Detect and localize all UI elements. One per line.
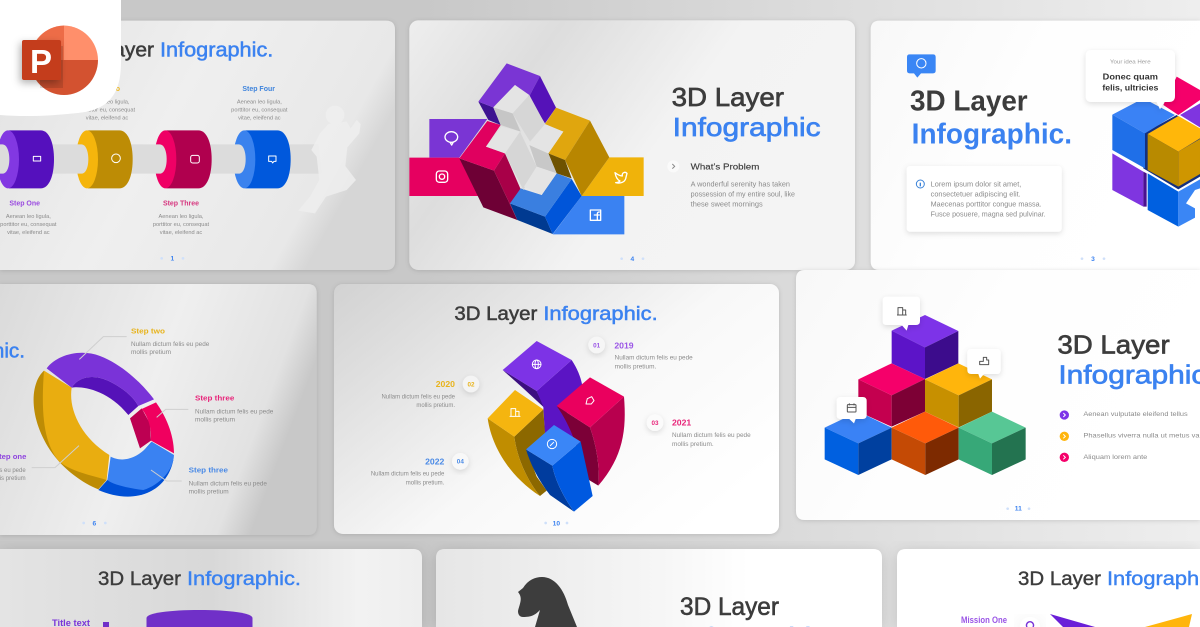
label: step two: Step two — [131, 326, 165, 335]
marker — [103, 622, 109, 627]
label: step four: Step Four — [242, 86, 275, 93]
label: step three: porttitor eu, consequat — [153, 222, 210, 228]
icon: globe — [532, 360, 541, 369]
white card overlapping cube — [1186, 188, 1200, 240]
label: 2022 — [371, 453, 469, 486]
title: bottom left: Infographic. — [187, 569, 301, 590]
title: slide 3: 3D Layer — [910, 86, 1028, 118]
cylinder: step four — [200, 130, 291, 188]
callout: calendar icon — [837, 397, 867, 423]
bar: connector to runner — [260, 144, 322, 174]
label: step one — [0, 200, 57, 236]
isometric block stack — [459, 63, 609, 234]
label: step three blue: mollis pretium — [189, 490, 229, 496]
title: slide 1: Infographic. — [160, 40, 273, 62]
label: 2021: 03 — [651, 420, 659, 427]
panel: slide 3 — [871, 21, 1200, 270]
page number: 3 — [1091, 256, 1095, 263]
label: step one: vitae, eleifend ac — [7, 230, 50, 236]
panel: slide 10 bars — [334, 284, 779, 534]
label: 2019: Nullam dictum felis eu pede — [615, 356, 693, 362]
title: slide 11: 3D Layer — [1057, 329, 1170, 359]
label: step two: vitae, eleifend ac — [86, 115, 128, 121]
label: mission one: Mission One — [961, 615, 1007, 625]
label: step three blue — [189, 466, 268, 496]
label: step two — [79, 86, 136, 121]
cylinder — [146, 610, 252, 627]
panel: slide 1 step cylinders — [0, 21, 395, 270]
text: what's problem — [691, 161, 795, 209]
callout: your idea here: felis, ultricies — [1102, 82, 1159, 92]
page number: 1 — [170, 256, 174, 263]
text: what's problem: What’s Problem — [691, 161, 759, 171]
label: step three blue: Step three — [189, 466, 228, 475]
panel: slide bottom middle — [436, 549, 882, 627]
panel: slide 4 layered blocks — [409, 20, 855, 270]
label: step three pink — [195, 394, 274, 424]
cylinder: step one — [0, 130, 54, 188]
page number: 11 — [1015, 506, 1022, 513]
label: step one: Step One — [9, 200, 40, 207]
label: step four: Aenean leo ligula, — [237, 99, 282, 105]
title: bottom right: 3D Layer — [1018, 569, 1102, 590]
label: 2019: 2019 — [614, 340, 634, 350]
title: bottom left — [98, 569, 301, 590]
label: step three pink: Step three — [195, 394, 234, 403]
label: step three: Aenean leo ligula, — [159, 214, 204, 220]
page number: 4 — [630, 256, 634, 263]
page number — [160, 256, 184, 263]
bullet list: Aliquam lorem ante — [1083, 454, 1148, 461]
runner silhouette — [298, 106, 361, 213]
label: 2019: 01 — [593, 342, 601, 349]
isometric cubes — [825, 315, 1026, 475]
page number — [544, 520, 568, 527]
page number — [1006, 506, 1030, 513]
title: slide 3 — [910, 86, 1072, 150]
arrow: yellow — [1145, 614, 1192, 627]
label: 2022: mollis pretium. — [406, 480, 445, 486]
text: what's problem: possession of my entire soul, like — [691, 192, 795, 199]
icon: chat bubble — [907, 54, 936, 78]
title: slide 11 — [1057, 329, 1200, 389]
label: 2021: 2021 — [672, 418, 691, 428]
text: what's problem: A wonderful serenity has taken — [691, 182, 790, 189]
flat ribbons — [409, 119, 644, 234]
title: bottom middle: 3D Layer — [680, 593, 779, 621]
icon: twitter — [615, 172, 627, 183]
label: 2021: mollis pretium. — [672, 442, 714, 448]
bullet list: Phasellus viverra nulla ut metus varius — [1083, 433, 1200, 440]
title: bottom left: 3D Layer — [98, 569, 182, 590]
arrow: purple — [1050, 614, 1095, 627]
label: step two: mollis pretium — [131, 350, 171, 356]
label: step one — [0, 452, 26, 482]
label: 2019 — [588, 337, 693, 371]
icon: chess knight — [518, 577, 577, 627]
label: step three — [153, 200, 210, 236]
callout: building icon — [883, 297, 920, 331]
title: slide 3: Infographic. — [912, 118, 1072, 150]
cube stack: slide 3 — [1086, 50, 1200, 240]
panel: slide 6 donut — [0, 284, 317, 535]
icon: building — [510, 409, 520, 416]
bullet chevron — [667, 160, 679, 172]
label: 2020: mollis pretium. — [416, 403, 455, 409]
label: 2020 — [381, 376, 479, 409]
icon: line — [445, 132, 458, 145]
page number: 6 — [92, 520, 96, 527]
leader lines — [32, 337, 188, 481]
cylinder: step three — [123, 130, 212, 188]
icon: PowerPoint logo: P — [30, 43, 52, 80]
page number — [1081, 256, 1105, 263]
title: slide 11: Infographic — [1058, 359, 1200, 389]
label: step four — [231, 86, 288, 121]
card: lorem ipsum: Lorem ipsum dolor sit amet, — [931, 182, 1021, 189]
title: slide 1 — [69, 40, 273, 62]
label: step three: Step Three — [163, 200, 199, 207]
label: step three: vitae, eleifend ac — [160, 230, 202, 236]
label: 2021: Nullam dictum felis eu pede — [672, 433, 751, 439]
label: 2022: 04 — [457, 459, 464, 466]
title: slide 10 — [454, 304, 658, 325]
label: step two — [131, 326, 210, 356]
label: step two: porttitor eu, consequat — [79, 107, 136, 113]
page number — [82, 520, 107, 527]
label: step two: Aenean leo ligula, — [85, 99, 130, 105]
title: slide 4: 3D Layer — [672, 82, 784, 112]
page number — [620, 256, 644, 263]
title: slide 10: Infographic. — [543, 304, 658, 325]
title: slide 4: Infographic — [673, 112, 821, 142]
card: lorem ipsum: Maecenas porttitor congue massa. — [931, 202, 1042, 209]
label: 2020: 2020 — [436, 379, 455, 389]
title: slide 10: 3D Layer — [454, 304, 538, 325]
3D bar chart — [488, 341, 625, 512]
label: 2020: Nullam dictum felis eu pede — [381, 394, 456, 400]
icon: instagram — [436, 171, 448, 182]
label: step two: Step Two — [89, 86, 120, 93]
label: 2020: 02 — [467, 381, 475, 388]
label: 2022: Nullam dictum felis eu pede — [371, 472, 445, 478]
label: 2019: mollis pretium. — [615, 365, 657, 371]
panel: slide bottom left — [0, 549, 422, 627]
label: step two: Nullam dictum felis eu pede — [131, 342, 210, 348]
label: step four: vitae, eleifend ac — [238, 115, 281, 121]
icon: compass — [547, 439, 557, 449]
label: step four: porttitor eu, consequat — [231, 107, 288, 113]
text: what's problem: these sweet mornings — [691, 202, 763, 209]
card: lorem ipsum: consectetuer adipiscing elit. — [931, 192, 1021, 199]
donut chart — [34, 353, 174, 497]
title: bottom middle — [680, 593, 826, 627]
icon: mission badge — [1020, 617, 1040, 627]
card: lorem ipsum — [907, 166, 1062, 232]
page number: 10 — [553, 520, 560, 527]
label: 2021 — [647, 414, 751, 448]
title: bottom right — [1018, 569, 1200, 590]
label: step one: porttitor eu, consequat — [0, 222, 57, 228]
label: step three pink: mollis pretium — [195, 418, 235, 424]
callout: chart icon — [967, 349, 1001, 379]
icon: facebook — [590, 210, 601, 220]
title: slide 1: 3D Layer — [69, 40, 154, 62]
bullet list: Aenean vulputate eleifend tellus — [1083, 411, 1188, 418]
callout: your idea here: Donec quam — [1103, 72, 1158, 82]
callout: your idea here: Your idea Here — [1110, 59, 1151, 65]
panel: slide bottom right — [897, 549, 1200, 627]
card: lorem ipsum: Fusce posuere, magna sed pulvinar. — [931, 212, 1046, 219]
label: step one: Aenean leo ligula, — [6, 214, 51, 220]
logo card: PowerPoint — [0, 0, 121, 116]
icon: pen — [586, 397, 594, 404]
callout: your idea here — [1086, 50, 1175, 109]
label: step three blue: Nullam dictum felis eu pede — [189, 482, 268, 488]
label: 2022: 2022 — [425, 456, 445, 466]
label: step three pink: Nullam dictum felis eu pede — [195, 410, 274, 416]
title: slide 4 — [672, 82, 821, 142]
bullet list — [1060, 410, 1200, 462]
cylinder: step two — [43, 130, 133, 188]
panel: slide 11 cube pyramid — [796, 270, 1200, 520]
